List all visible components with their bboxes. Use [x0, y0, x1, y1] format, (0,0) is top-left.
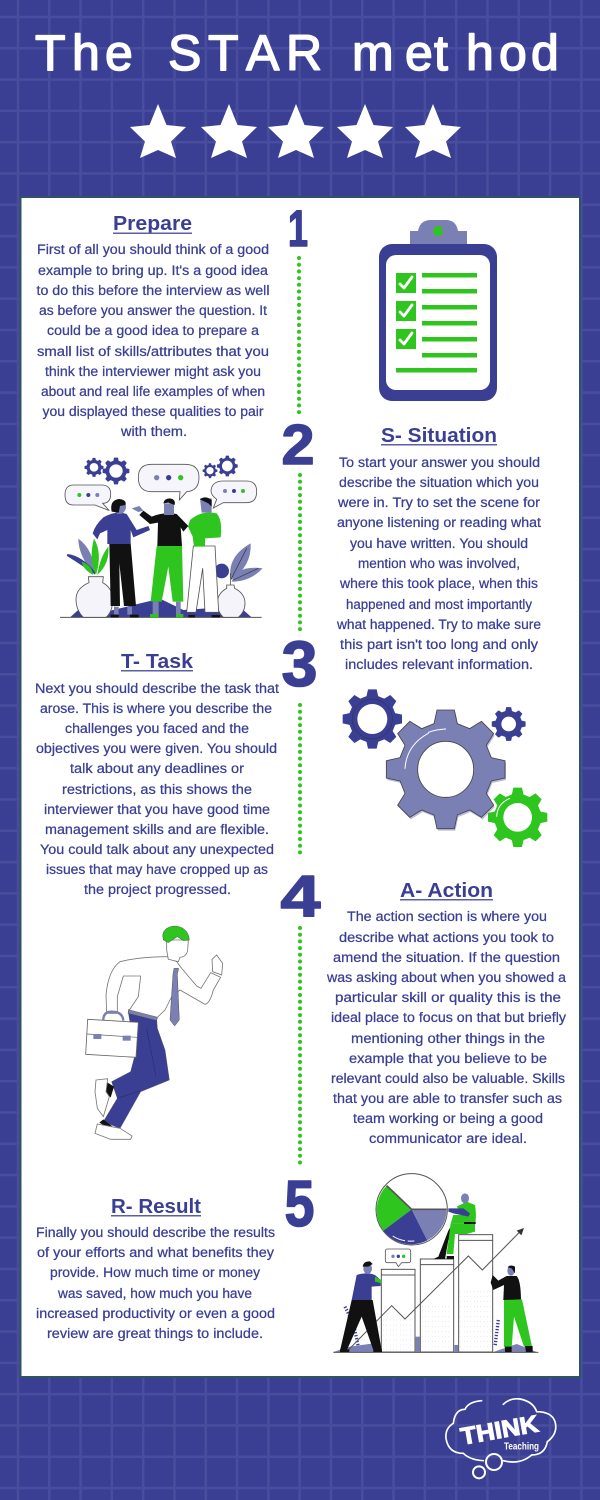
- text block: Action: relevant could also be valuable. Skills: [331, 1071, 565, 1086]
- briefcase: [86, 1019, 138, 1057]
- text block: Task: management skills and are flexible.: [45, 822, 269, 837]
- illustration: gears: [343, 689, 547, 847]
- text block: Action: ideal place to focus on that but briefly: [331, 1010, 566, 1025]
- text block: Prepare: small list of skills/attributes that you: [37, 344, 269, 359]
- belt: [128, 1009, 157, 1021]
- text block: Prepare: to do this before the interview as well: [36, 283, 270, 298]
- text block: Task: objectives you were given. You should: [36, 741, 277, 756]
- trousers: [103, 1012, 169, 1128]
- text block: Task: You could talk about any unexpected: [40, 842, 274, 857]
- dotted bar fills: [383, 1292, 491, 1350]
- ground and plants: [333, 1343, 537, 1352]
- hair: [163, 926, 189, 943]
- icon: clipboard checklist: [379, 220, 497, 401]
- person 2: [132, 498, 188, 617]
- illustration: three people talking: [60, 456, 263, 617]
- five stars rating: [130, 104, 461, 158]
- text block: Action: mentioning other things in the: [351, 1031, 545, 1046]
- person 3: [187, 497, 221, 617]
- speech bubble left: [65, 485, 111, 511]
- logo: Think Teaching: [446, 1399, 556, 1478]
- text block: Action: The action section is where you: [347, 909, 547, 924]
- text block: Result: increased productivity or even a good: [36, 1306, 275, 1321]
- text block: Prepare: could be a good idea to prepare a: [47, 323, 260, 338]
- THINK wordmark: THINK: [459, 1410, 541, 1451]
- number 1: 1: [288, 200, 308, 257]
- text block: Prepare: about and real life examples of when: [41, 384, 265, 399]
- shirt and arms: [106, 957, 221, 1017]
- text block: Situation: you have written. You should: [350, 536, 528, 551]
- text block: Situation: this part isn't too long and only: [340, 637, 538, 652]
- text block: Situation: describe the situation which you: [339, 475, 539, 490]
- tie: [170, 968, 179, 1026]
- text block: Task: arose. This is where you describe the: [40, 701, 272, 716]
- main white panel: [20, 197, 580, 1377]
- navy gear: [343, 689, 402, 749]
- person 1: [93, 499, 150, 617]
- text block: Action: amend the situation. If the question: [333, 950, 560, 965]
- text block: Result: review are great things to include.: [47, 1326, 263, 1341]
- timeline dots 1: [297, 258, 301, 415]
- big lilac gear: [386, 710, 506, 831]
- briefcase handle: [103, 1012, 123, 1021]
- thought cloud outline: [446, 1399, 556, 1462]
- text block: Situation: what happened. Try to make sure: [336, 617, 541, 632]
- text block: Situation: where this took place, when this: [339, 576, 538, 591]
- thought bubbles: [486, 1454, 502, 1470]
- heading: S- Situation: S- Situation: [381, 425, 497, 447]
- small gears: [85, 456, 238, 484]
- speech bubble right: [211, 481, 257, 508]
- green gear: [488, 788, 547, 847]
- number 5: 5: [284, 1167, 314, 1240]
- timeline dots 4: [298, 928, 302, 1164]
- text block: Action: describe what actions you took to: [339, 930, 554, 945]
- text block: Result: of your efforts and what benefits they: [37, 1245, 274, 1260]
- text block: Situation: To start your answer you should: [339, 455, 540, 470]
- text block: Prepare: example to bring up. It's a good idea: [38, 263, 269, 278]
- title: The STAR method: [35, 25, 559, 81]
- vase left: [76, 577, 113, 617]
- text block: Prepare: think the interviewer might ask you: [45, 364, 261, 379]
- shoes and socks: [95, 1079, 132, 1139]
- text block: Task: [35, 681, 279, 897]
- text block: Situation: [336, 455, 541, 672]
- text block: Task: restrictions, as this shows the: [62, 782, 252, 797]
- person left: [340, 1261, 382, 1352]
- text block: Action: example that you believe to be: [349, 1051, 547, 1066]
- heading: Prepare: Prepare: [113, 213, 192, 235]
- raised hand: [212, 955, 223, 975]
- bars: [381, 1235, 493, 1352]
- text block: Task: the project progressed.: [84, 882, 231, 897]
- text block: Result: was saved, how much you have: [57, 1286, 252, 1301]
- text block: Action: particular skill or quality this is the: [335, 990, 561, 1005]
- speech bubble centre: [138, 464, 199, 500]
- small navy gear: [492, 707, 526, 741]
- text block: Action: that you are able to transfer such as: [333, 1091, 562, 1106]
- text block: Situation: mention who was involved,: [358, 556, 520, 571]
- speech bubble: [385, 1249, 411, 1267]
- plant right: [214, 543, 263, 585]
- text block: Prepare: First of all you should think of a good: [37, 242, 269, 257]
- person right: [491, 1265, 533, 1352]
- text block: Task: interviewer that you have good time: [44, 802, 270, 817]
- pie chart: [376, 1174, 447, 1245]
- plant left: [67, 538, 109, 575]
- vase right: [217, 585, 245, 617]
- text block: Action: [326, 909, 567, 1146]
- text block: Action: team working or being a good: [353, 1111, 543, 1126]
- text block: Task: Next you should describe the task that: [35, 681, 279, 696]
- rising arrow: [348, 1228, 524, 1350]
- text block: Action: was asking about when you showed a: [326, 970, 567, 985]
- text block: Prepare: you displayed these qualities to pair: [42, 404, 264, 419]
- text block: Action: communicator are ideal.: [369, 1131, 527, 1146]
- text block: Situation: were in. Try to set the scene for: [337, 495, 541, 510]
- number 3: 3: [282, 628, 318, 700]
- text block: Result: provide. How much time or money: [50, 1265, 260, 1280]
- illustration: people with charts: [333, 1174, 538, 1352]
- Teaching wordmark: Teaching: [504, 1442, 539, 1453]
- heading: A- Action: A- Action: [400, 880, 493, 902]
- text block: Task: issues that may have cropped up as: [46, 862, 268, 877]
- text block: Situation: includes relevant information.: [345, 657, 533, 672]
- timeline dots 2: [298, 475, 302, 631]
- number 2: 2: [282, 413, 314, 477]
- text block: Task: challenges you faced and the: [65, 721, 249, 736]
- heading: T- Task: T- Task: [121, 651, 194, 673]
- text block: Prepare: as before you answer the question. It: [39, 303, 267, 318]
- ground hills: [70, 599, 252, 617]
- person sitting on bar: [433, 1193, 476, 1259]
- heading: R- Result: R- Result: [111, 1196, 201, 1218]
- text block: Situation: happened and most importantly: [346, 597, 532, 612]
- illustration: running businessman: [86, 926, 223, 1139]
- number 4: 4: [280, 864, 320, 929]
- text block: Prepare: [36, 242, 270, 439]
- text block: Result: Finally you should describe the results: [36, 1225, 275, 1240]
- head: [167, 940, 188, 962]
- text block: Prepare: with them.: [120, 424, 187, 439]
- text block: Task: talk about any deadlines or: [70, 761, 245, 776]
- timeline dots 3: [298, 705, 302, 859]
- text block: Result: [36, 1225, 275, 1341]
- text block: Situation: anyone listening or reading what: [337, 515, 541, 530]
